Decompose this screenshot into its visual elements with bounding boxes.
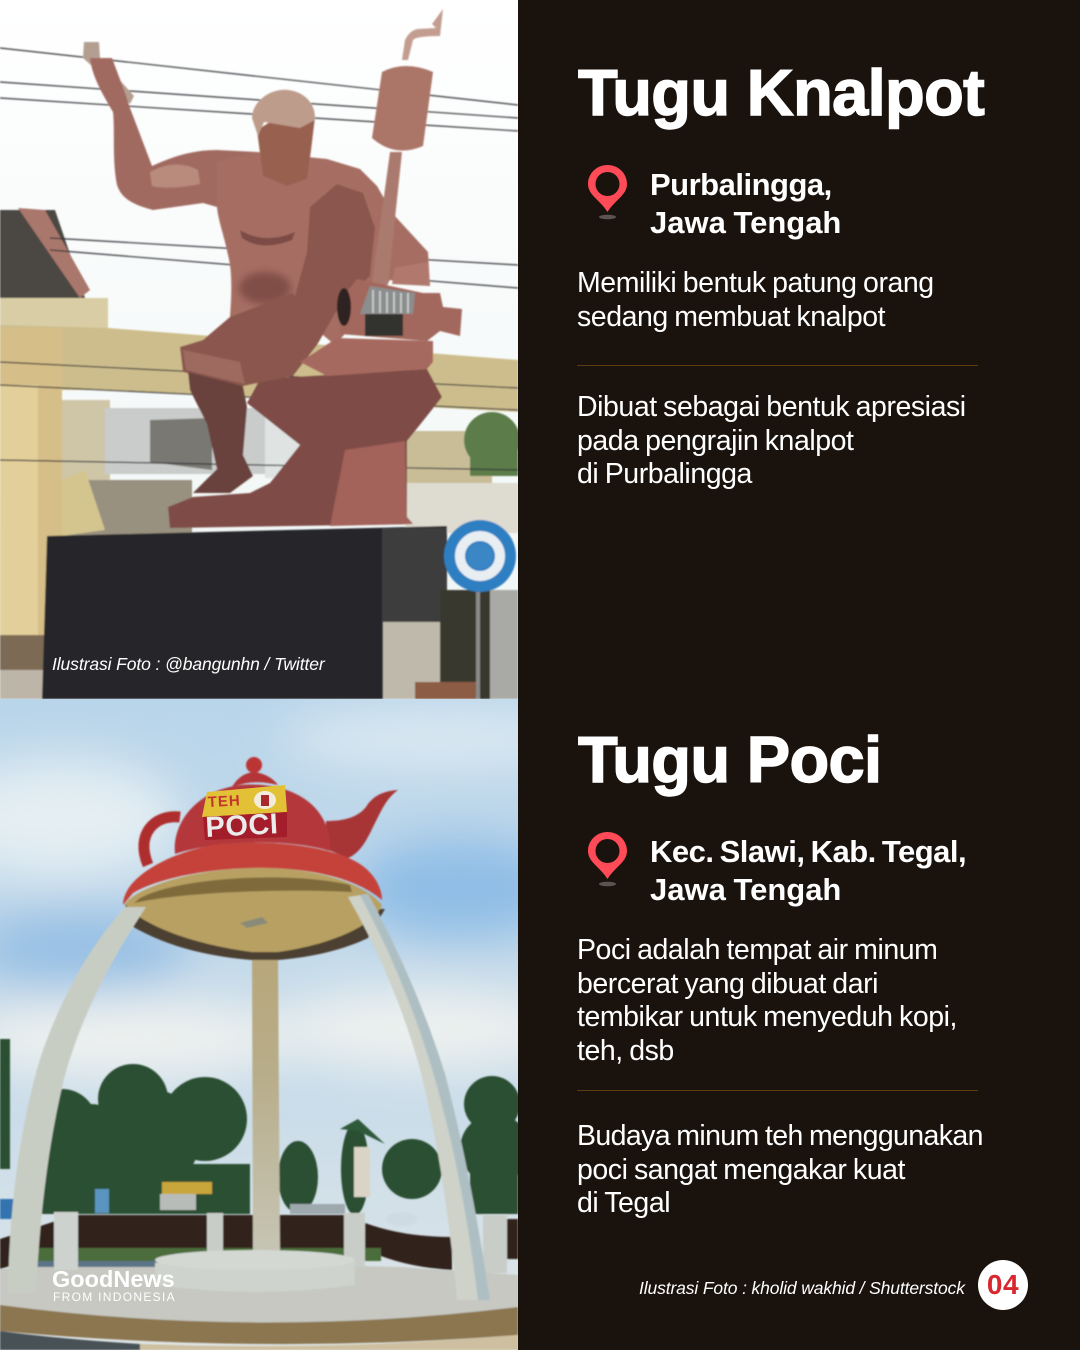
- arches: [8, 907, 146, 1293]
- teapot handle and spout: [144, 817, 180, 865]
- text: poci description: tembikar untuk menyeduh kopi,: [577, 1001, 957, 1033]
- text: tea culture: poci sangat mengakar kuat: [577, 1154, 905, 1186]
- plinth: [155, 1254, 355, 1292]
- teapot label: [202, 785, 287, 844]
- photo: Tugu Poci teapot monument: [0, 699, 518, 1350]
- icon: location pin: [588, 165, 627, 220]
- location: Purbalingga: Jawa Tengah: [650, 205, 841, 240]
- teapot label: TEH: [207, 792, 241, 811]
- wires: [0, 48, 518, 470]
- ground: [0, 1261, 518, 1323]
- posts: [54, 1212, 78, 1270]
- logo: [52, 1266, 176, 1304]
- text: knalpot description: [577, 267, 934, 333]
- building roof and walls: [0, 210, 85, 298]
- title: Tugu Poci: Tugu Poci: [578, 723, 881, 796]
- location: Purbalingga: Purbalingga,: [650, 167, 832, 202]
- caption: Ilustrasi Foto : @bangunhn / Twitter: [52, 654, 326, 674]
- pedestal: [42, 526, 447, 699]
- text: knalpot appreciation: [577, 391, 966, 490]
- text: tea culture: [577, 1120, 983, 1219]
- hand on device: [392, 262, 430, 286]
- round traffic sign: [444, 520, 516, 592]
- logo: FROM INDONESIA: [53, 1290, 176, 1304]
- title: Tugu Knalpot: Tugu Knalpot: [578, 56, 984, 129]
- exhaust muffler and pipe: [402, 9, 443, 60]
- clouds: [0, 709, 600, 1079]
- text: tea culture: di Tegal: [577, 1187, 670, 1219]
- page number badge: [978, 1260, 1028, 1310]
- page number badge: 04: [987, 1269, 1019, 1300]
- text: knalpot appreciation: Dibuat sebagai bentuk apresiasi: [577, 391, 966, 423]
- text: knalpot description: Memiliki bentuk patung orang: [577, 267, 934, 299]
- location: Slawi: [650, 834, 966, 907]
- icon: location pin: [588, 832, 627, 886]
- location: Slawi: Jawa Tengah: [650, 872, 841, 907]
- shorts: [180, 293, 317, 386]
- raised arm and hammer: [83, 42, 134, 104]
- text: knalpot description: sedang membuat knalpot: [577, 301, 885, 333]
- photo: Tugu Knalpot statue: [0, 0, 518, 699]
- text: poci description: bercerat yang dibuat dari: [577, 968, 878, 1000]
- text: poci description: teh, dsb: [577, 1035, 674, 1067]
- location: Slawi: Kec. Slawi, Kab. Tegal,: [650, 834, 966, 869]
- platform underside: [125, 904, 385, 960]
- text: poci description: Poci adalah tempat air minum: [577, 934, 937, 966]
- raised knee: [293, 184, 375, 345]
- torso: [217, 152, 430, 345]
- central column: [252, 954, 280, 1254]
- low fence: [75, 1215, 345, 1251]
- hair: [252, 90, 315, 136]
- exhaust device: [338, 279, 462, 341]
- photo credit: Ilustrasi Foto : kholid wakhid / Shutterstock: [639, 1278, 965, 1298]
- statue base and anvil: [168, 369, 442, 528]
- logo: GoodNews: [52, 1266, 175, 1292]
- location: Purbalingga: [650, 167, 841, 240]
- text: knalpot appreciation: di Purbalingga: [577, 458, 752, 490]
- head: [257, 110, 315, 186]
- lower leg: [188, 372, 253, 493]
- text: tea culture: Budaya minum teh menggunakan: [577, 1120, 983, 1152]
- trees: [0, 1039, 530, 1215]
- red rim: [123, 843, 382, 905]
- text: knalpot appreciation: pada pengrajin knalpot: [577, 425, 854, 457]
- text: poci description: [577, 934, 957, 1067]
- teapot label: POCI: [205, 808, 279, 844]
- anvil top: [300, 338, 433, 376]
- teapot body: [175, 785, 330, 854]
- lower base lip: [0, 1305, 518, 1344]
